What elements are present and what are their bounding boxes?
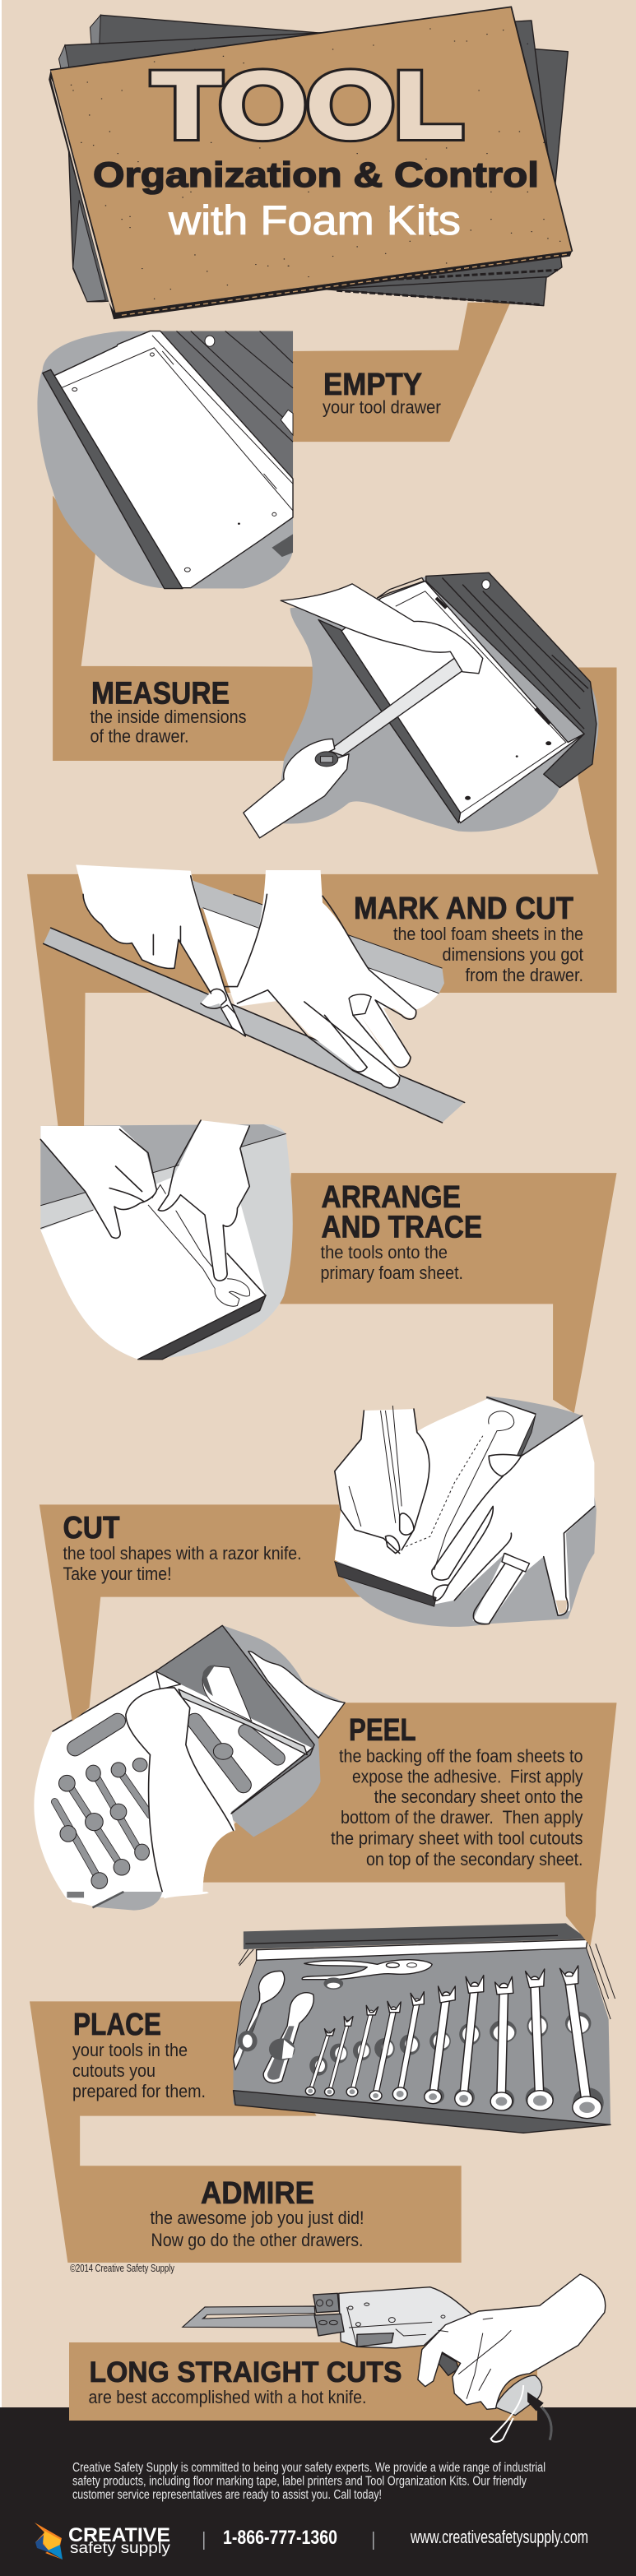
- company description: safety products, including floor marking tape, label printers and Tool Organization Kits. Our friendly: [72, 2474, 527, 2489]
- heading: admire: ADMIRE: [201, 2176, 314, 2211]
- text: mark and cut: [393, 924, 584, 985]
- text: arrange: [321, 1242, 463, 1283]
- illustration: measuring drawer: [244, 572, 598, 838]
- text: place: cutouts you: [72, 2060, 156, 2081]
- illustration lower foam edge: [67, 1892, 209, 1911]
- heading: TOOL: TOOL: [152, 53, 463, 158]
- text: empty: your tool drawer: [323, 396, 441, 418]
- footer band: [0, 2407, 636, 2576]
- foam sheets stack: [49, 7, 572, 319]
- hand: [126, 1688, 234, 1892]
- text: peel: the primary sheet with tool cutouts: [331, 1828, 583, 1849]
- logo: Creative Safety Supply: [35, 2523, 171, 2560]
- panel: cut: [39, 1397, 597, 1721]
- text: measure: [91, 707, 247, 747]
- text: admire: Now go do the other drawers.: [151, 2230, 364, 2250]
- icon: hot knife and hand: [183, 2274, 606, 2442]
- mark label band: [27, 770, 617, 1126]
- handwritten subtitle: with Foam Kits: [168, 197, 461, 243]
- description: are best accomplished with a hot knife.: [89, 2387, 367, 2407]
- text: place: [72, 2040, 206, 2101]
- text: peel: on top of the secondary sheet.: [366, 1849, 583, 1869]
- illustration: hands cutting foam: [335, 1397, 597, 1627]
- wrench shanks outline: [310, 1976, 587, 2107]
- arrange label band: [280, 1173, 617, 1413]
- phone number: 1-866-777-1360: [223, 2527, 337, 2549]
- left hand: [76, 864, 245, 1035]
- heading: peel: PEEL: [349, 1713, 416, 1748]
- connector right: [578, 667, 617, 839]
- heading: arrange and trace: [321, 1180, 482, 1245]
- text: peel: the backing off the foam sheets to: [339, 1745, 583, 1767]
- text: place: prepared for them.: [72, 2081, 206, 2101]
- text: mark and cut: dimensions you got: [443, 944, 584, 965]
- text: admire: [150, 2208, 364, 2250]
- panel: peel: [34, 1625, 617, 1946]
- right hand: [237, 870, 415, 1087]
- heading: TOOL: TOOL: [152, 53, 463, 158]
- wrench rings: [305, 2087, 601, 2119]
- empty label band: [293, 303, 510, 442]
- illustration: tracing wrench: [40, 1120, 293, 1360]
- company description: [72, 2461, 545, 2502]
- panel: place and admire: [30, 1923, 615, 2263]
- text: cut: [63, 1543, 301, 1584]
- text: mark and cut: the tool foam sheets in the: [393, 924, 583, 944]
- text: cut: Take your time!: [63, 1564, 171, 1584]
- connector band: [30, 2001, 462, 2263]
- panel: empty: [37, 303, 510, 589]
- copyright: ©2014 Creative Safety Supply: [70, 2263, 175, 2274]
- text: place: your tools in the: [72, 2040, 188, 2060]
- panel: long straight cuts: [69, 2274, 606, 2442]
- inner white of cutouts: [315, 2016, 588, 2072]
- heading: mark and cut: MARK AND CUT: [354, 892, 573, 926]
- company description: customer service representatives are ready to assist you. Call today!: [72, 2488, 382, 2502]
- label box: [69, 2342, 537, 2421]
- pliers: [302, 1960, 432, 1980]
- heading: place: PLACE: [73, 2008, 161, 2042]
- heading: arrange and trace: AND TRACE: [321, 1211, 482, 1245]
- panel: measure: [53, 495, 617, 839]
- text: mark and cut: from the drawer.: [466, 965, 583, 985]
- heading: empty: EMPTY: [323, 368, 422, 402]
- panel: arrange and trace: [40, 1120, 617, 1413]
- illustration: empty drawer: [37, 331, 293, 589]
- text: peel: bottom of the drawer. Then apply: [341, 1807, 583, 1828]
- panel: mark and cut: [27, 770, 617, 1126]
- text: arrange: primary foam sheet.: [321, 1263, 463, 1283]
- illustration: hands with ruler: [44, 864, 465, 1123]
- logo: Creative Safety Supply: CREATIVE: [68, 2524, 170, 2546]
- heading: cut: CUT: [63, 1511, 120, 1545]
- adjustable wrenches: [234, 1971, 285, 2070]
- heading: LONG STRAIGHT CUTS: [89, 2356, 402, 2388]
- text: measure: the inside dimensions: [91, 707, 247, 727]
- text: peel: expose the adhesive. First apply: [352, 1767, 583, 1786]
- foam tool cutouts: [55, 1721, 278, 1884]
- wrench heads: [324, 1966, 578, 2036]
- cut label band: [39, 1504, 361, 1721]
- illustration: wrenches in drawer: [234, 1923, 615, 2133]
- measure label band: [53, 495, 313, 761]
- text: arrange: the tools onto the: [321, 1242, 448, 1263]
- peel label band: [203, 1703, 617, 1946]
- text: cut: the tool shapes with a razor knife.: [63, 1543, 301, 1564]
- text: peel: the secondary sheet onto the: [374, 1786, 583, 1807]
- subheading: Organization & Control: [93, 155, 539, 195]
- right hand: [158, 1120, 249, 1281]
- text: measure: of the drawer.: [91, 725, 189, 747]
- heading: measure: MEASURE: [91, 676, 230, 711]
- heading: arrange and trace: ARRANGE: [321, 1180, 461, 1215]
- icon: logo bolt: [35, 2523, 63, 2560]
- text: peel: [331, 1745, 583, 1869]
- lower hand: [244, 739, 349, 838]
- text: admire: the awesome job you just did!: [150, 2208, 364, 2228]
- speckles: [71, 29, 560, 299]
- illustration: peeling foam: [34, 1625, 345, 1907]
- wrench being traced: [148, 1184, 250, 1306]
- logo: Creative Safety Supply: safety supply: [70, 2540, 171, 2557]
- left hand: [40, 1126, 156, 1239]
- title card: [49, 7, 572, 319]
- peeling strip: [179, 1689, 307, 1755]
- wrench cutouts: [309, 2012, 604, 2118]
- paper and upper hand: [281, 584, 483, 674]
